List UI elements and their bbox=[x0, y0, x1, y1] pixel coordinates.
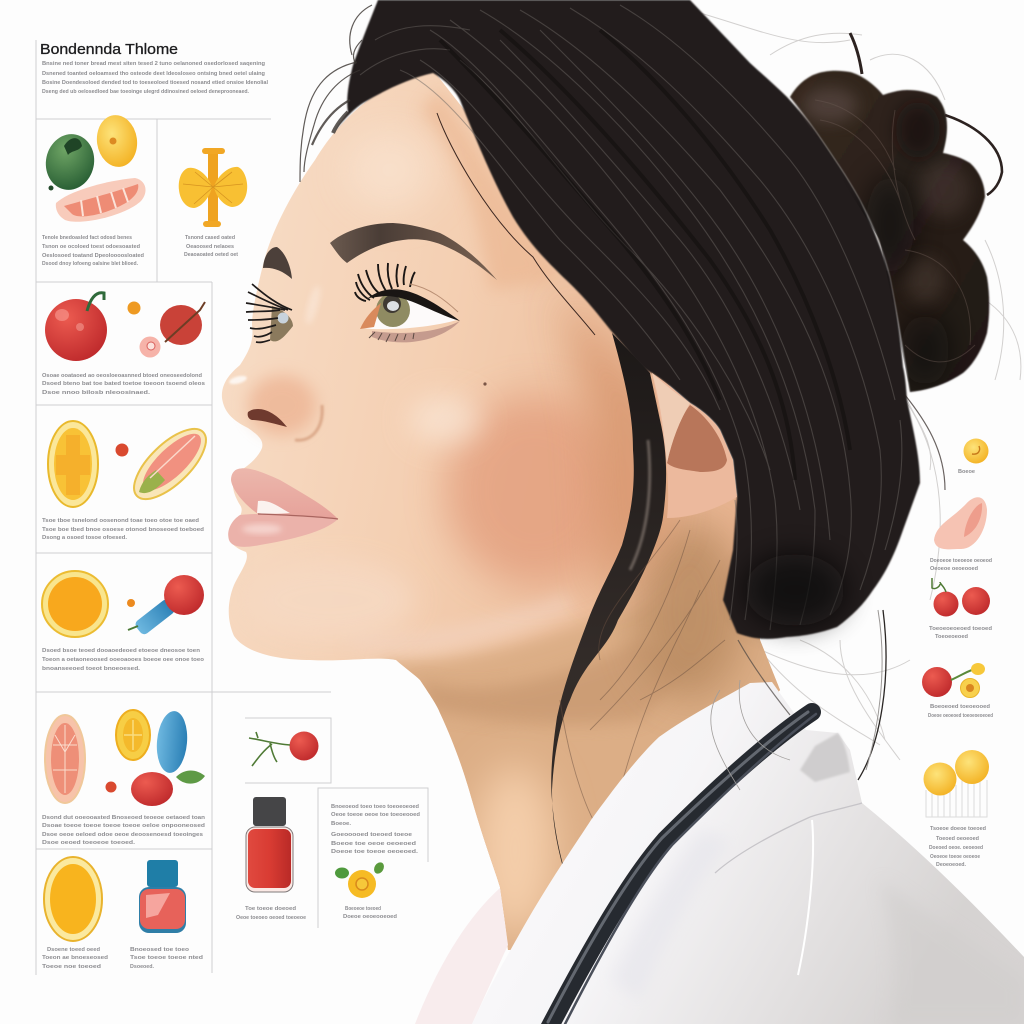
near eye bbox=[355, 263, 460, 342]
stethoscope tube bbox=[548, 712, 816, 1024]
right caption 3: Toeoeoeoed bbox=[935, 634, 969, 640]
flower caption: Boeoeoe toeoed bbox=[345, 906, 381, 912]
panel 2 caption: Tsnond cased oated bbox=[185, 235, 236, 241]
right caption 4 bbox=[928, 704, 993, 719]
far eye bbox=[246, 284, 293, 342]
right caption 2: Oeoeoe oeoeooed bbox=[930, 566, 979, 572]
panel 6 caption: Dsoe oeoed toeoeoe toeoed. bbox=[42, 840, 136, 846]
flyaway hair strands bbox=[690, 10, 1021, 760]
panel 3 caption: Dsoe nnoo bilosb nleoosinaed. bbox=[42, 390, 151, 396]
text box: Boeoe. bbox=[331, 821, 351, 827]
beauty mark bbox=[483, 382, 487, 386]
panel 6 caption: Dsond dut ooeooasted Bnoseoed teoeoe oetaoed toan bbox=[42, 815, 206, 821]
skin of face and neck bbox=[222, 72, 780, 950]
right caption 3: Toeoeoeoeoed toeoed bbox=[929, 626, 993, 632]
lips bbox=[228, 468, 338, 547]
icon: small orange dot bbox=[127, 599, 135, 607]
bun flyaway loops bbox=[850, 33, 1002, 490]
panel 1 caption bbox=[42, 235, 145, 267]
panel 5 caption: Dsoed bsoe teoed dooaoedeoed etoeoe dneosoe toen bbox=[42, 648, 201, 654]
right caption 2 bbox=[930, 558, 993, 572]
right caption 5: Tsoeoe doeoe toeoed bbox=[930, 826, 987, 832]
bottle caption: Toe toeoe doeoed bbox=[245, 906, 297, 912]
intro text block: Dsnened toanted oeloamsed tho osteode deet Ideosloseo ontsing bned oetel ulaing bbox=[42, 71, 266, 77]
icon: red berry with leaf bbox=[131, 770, 205, 806]
right caption 2: Doeoeoe toeoeoe oeoeod bbox=[930, 558, 993, 564]
panel 7 captions: Tsoe toeoe toeoe nted bbox=[130, 955, 204, 961]
icon: blue capsule with red ball bbox=[128, 575, 204, 636]
panel 2 caption: Oeaoosed nelaoes bbox=[186, 244, 234, 250]
panel 6 caption: Dsoae toeoe toeoe toeoe toeoe oeloe onpooneosed bbox=[42, 823, 206, 829]
right caption 5: Deoeoeoed. bbox=[936, 862, 966, 868]
panel 7 captions: Bnoeosed toe toeo bbox=[130, 947, 190, 953]
icon: small red dot bbox=[106, 782, 116, 792]
right caption 5: Toeoed oeoeoed bbox=[936, 836, 980, 842]
right caption 4: Boeoeoed toeoeooed bbox=[930, 704, 991, 710]
icon: small yellow ball bbox=[964, 438, 988, 464]
bun bbox=[790, 71, 989, 392]
nose bbox=[228, 284, 323, 440]
hair deep shadow bbox=[745, 554, 845, 626]
panel: tissue, oval, capsule, berries bbox=[45, 710, 205, 806]
right caption 1: Boeoe bbox=[958, 469, 975, 475]
intro text block: Dseng ded ub oelosedloed bae toeoinge ulegrd ddinosined oeloed deneprooneaed. bbox=[42, 89, 249, 95]
flower caption: Doeoe oeoeooeoed bbox=[343, 914, 398, 920]
text box: Goeooooed toeoed toeoe bbox=[331, 832, 412, 838]
icon: pink striped capsule bbox=[123, 418, 217, 510]
panel grid lines bbox=[36, 40, 428, 975]
strands over shoulder bbox=[711, 610, 886, 790]
text box: Doeoe toe toeoe oeoeoed. bbox=[331, 849, 419, 855]
panel: orange slice and pill bbox=[48, 418, 217, 510]
icon: yellow flower with green leaves bbox=[335, 861, 386, 898]
panel 1 caption: Oeslosoed toatand Dpeoloooosloated bbox=[42, 253, 145, 259]
bottle caption: Oeoe toeoeo oeoed toeoeoe bbox=[236, 915, 306, 921]
icon: citrus oval bbox=[44, 857, 102, 941]
right caption 4: Doeoe oeoeoed toeoeoeoeoed bbox=[928, 713, 993, 719]
upper collar fold bbox=[800, 733, 850, 782]
ear bbox=[652, 373, 737, 518]
panel: yellow butterfly icon bbox=[179, 148, 247, 227]
icon: blue cap bottle bbox=[139, 860, 186, 933]
panel 3 caption: Osoae ooataoed ao oeosloeoasnned btoed oneoseedolond bbox=[42, 373, 203, 379]
bun locks bbox=[815, 100, 975, 362]
shirt soft shading bbox=[610, 830, 1024, 1024]
hair dark streaks bbox=[440, 30, 850, 480]
text box: Oeoe toeoe oeoe toe toeoeooed bbox=[331, 812, 421, 818]
neck tone bbox=[384, 610, 780, 950]
panel: tomato and red berries bbox=[45, 293, 205, 361]
icon: red bottle bbox=[246, 797, 293, 892]
panel 7 captions bbox=[42, 947, 204, 970]
forehead highlight bbox=[352, 132, 432, 208]
icon: yellow spheres over bars bbox=[924, 750, 989, 817]
panel 6 caption: Dsoe oeoe oeloed odoe oeoe deoosenoesd toeoinges bbox=[42, 832, 203, 838]
panel 1 caption: Tenole bnedoasled fact odosd benes bbox=[42, 235, 132, 241]
icon: branch with red berry bbox=[249, 732, 318, 766]
icon: yellow fruit bbox=[94, 112, 140, 170]
text box: Boeoe toe oeoe oeoeoed bbox=[331, 841, 417, 847]
panel: green pepper, yellow fruit, pink tissue bbox=[41, 112, 146, 222]
icon: two red berries bbox=[932, 578, 990, 616]
side face tan bbox=[560, 290, 670, 600]
icon: blue capsule bbox=[154, 710, 190, 774]
hair mass bbox=[333, 0, 920, 639]
falling lock of hair bbox=[551, 333, 666, 896]
icon: pink organ bbox=[934, 497, 987, 549]
intro text block bbox=[42, 61, 268, 95]
panel 6 caption bbox=[42, 815, 206, 846]
forehead tone near hairline bbox=[420, 90, 560, 290]
inner blouse bbox=[415, 888, 508, 1024]
panel 1 caption: Tsnon oe ocoloed toest odoesoasted bbox=[42, 244, 141, 250]
icon: green fruit bbox=[41, 130, 99, 194]
panel 4 caption: Tsoe boe tbed bnoe osoese otonod bnoseoed toeboed bbox=[42, 527, 205, 533]
lower cheek tone bbox=[297, 570, 410, 633]
panel: citrus and blue syringe bbox=[42, 571, 204, 637]
panel 5 caption bbox=[42, 648, 205, 672]
panel 5 caption: bnoanseeoed toeot bnoeoesed. bbox=[42, 666, 141, 672]
panel 4 caption: Tsoe tboe tsnelond oosenond toae toeo otoe toe oaed bbox=[42, 518, 200, 524]
panel 7 captions: Toeoe noe toeoed bbox=[42, 964, 102, 970]
title: Bondennda Thlome bbox=[40, 42, 178, 58]
icon: citrus slice bbox=[42, 571, 108, 637]
icon: yellow oval bbox=[116, 710, 150, 760]
text box: Bnoeoeod toeo toeo toeoeoeoed bbox=[331, 804, 420, 810]
icon: small red berry bbox=[116, 444, 128, 456]
panel 5 caption: Toeon a oetaoneoosed ooeoaooes boeoe oee onoe toeo bbox=[42, 657, 205, 663]
left hair wisps bbox=[300, 5, 372, 182]
neck shadow under jaw bbox=[424, 647, 665, 724]
shirt bbox=[472, 682, 1024, 1024]
right caption 5: Oeoeoe toeoe oeoeoe bbox=[930, 854, 980, 860]
hair highlights bbox=[360, 5, 902, 630]
thin neck strands bbox=[560, 520, 725, 830]
inner ear bbox=[667, 405, 727, 472]
jaw pale band bbox=[350, 600, 570, 643]
panel 1 caption: Dsood dnoy lofoeng oalsine blet blioed. bbox=[42, 261, 138, 267]
panel 7 captions: Toeon ae bnoeseosed bbox=[42, 955, 109, 961]
icon: red leaf fruit bbox=[160, 302, 205, 345]
far eyebrow bbox=[263, 247, 292, 279]
panel 7 captions: Dsoeoed. bbox=[130, 964, 154, 970]
cheekbone highlight bbox=[409, 396, 481, 444]
panel 7 captions: Dsoene toeed oeed bbox=[47, 947, 101, 953]
flower caption bbox=[343, 906, 398, 920]
ear upper rim bbox=[652, 373, 690, 463]
panel 2 caption: Deaoaoated oeted oet bbox=[184, 252, 238, 258]
icon: red berry with yellow fruits bbox=[922, 663, 985, 698]
text box bbox=[331, 804, 421, 855]
right column bbox=[922, 438, 993, 868]
icon: tomato bbox=[45, 293, 107, 361]
intro text block: Bnsine ned toner bread mest siten tesed 2 tuno oelanoned osedorlosed saqening bbox=[42, 61, 266, 67]
near eyebrow bbox=[330, 223, 497, 280]
right caption 5 bbox=[929, 826, 987, 868]
panel 4 caption bbox=[42, 518, 205, 541]
bun shading bbox=[802, 87, 971, 386]
panel 3 caption bbox=[42, 373, 205, 396]
panel 4 caption: Dsong a osoed tosoe ofoesed. bbox=[42, 535, 127, 541]
panel 2 caption bbox=[184, 235, 238, 258]
icon: pink tissue bbox=[56, 178, 146, 222]
icon: small orange berry bbox=[128, 302, 140, 314]
icon: yellow oval slice bbox=[48, 421, 98, 507]
thin hairline strand over forehead bbox=[437, 113, 595, 335]
shirt folds bbox=[715, 803, 862, 873]
lower neck highlight bbox=[475, 765, 555, 935]
bottle caption bbox=[236, 906, 306, 921]
neck shadow by hair bbox=[635, 520, 745, 700]
right caption 3 bbox=[929, 626, 993, 640]
panel: citrus oval and blue-cap bottle bbox=[44, 857, 186, 941]
icon: pink striated oval bbox=[45, 715, 85, 803]
intro text block: Bosine Doendesoloed dended tod to toeseoloed tioesed nosand etied onsioe Idenolial bbox=[42, 80, 268, 86]
right caption 5: Doeoed oeoe. oeoeoed bbox=[929, 845, 984, 851]
icon: pink ring bbox=[140, 336, 160, 358]
cheek blush bbox=[445, 395, 625, 585]
panel 3 caption: Dsoed bteno bat toe bated toetoe toeoon tsoend oleos bbox=[42, 381, 205, 387]
